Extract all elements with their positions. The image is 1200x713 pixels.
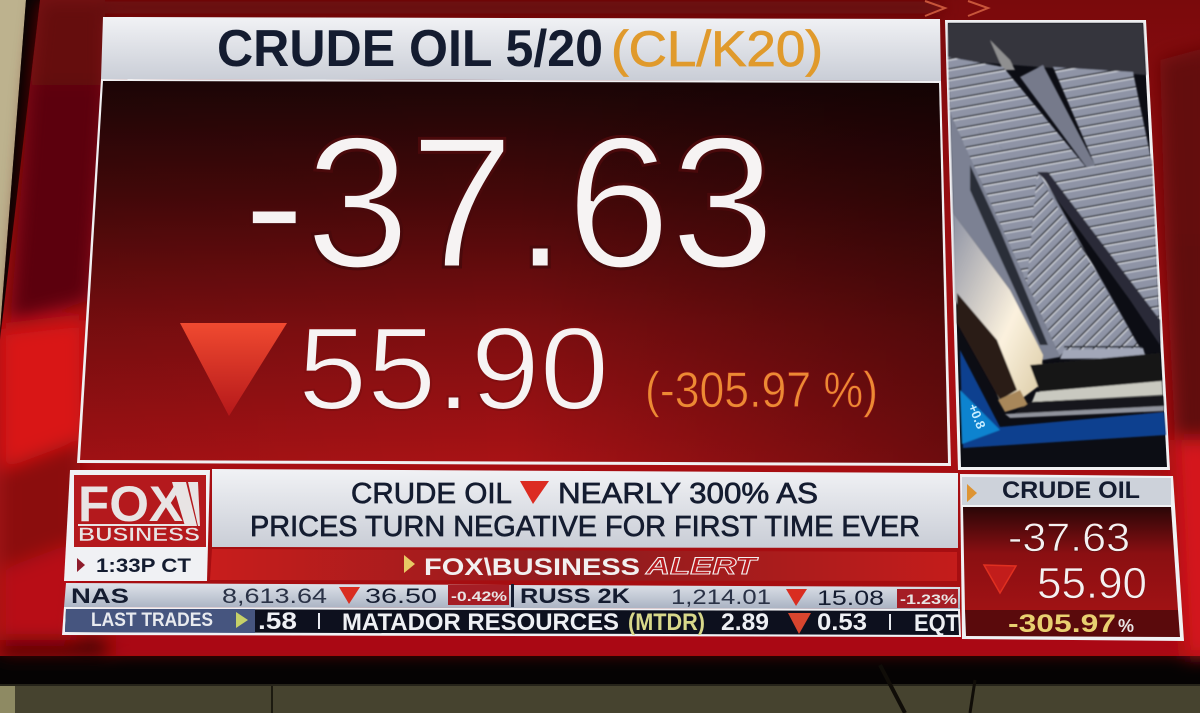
headline line 2: PRICES TURN NEGATIVE FOR FIRST TIME EVER <box>250 511 920 543</box>
last trades ticker: MATADOR RESOURCES <box>342 609 619 636</box>
left bar <box>948 57 1143 357</box>
fox business logo and time: BUSINESS <box>78 525 200 546</box>
title bar: (CL/K20) <box>611 21 823 77</box>
lower frame bands <box>1030 353 1162 392</box>
index ticker: 15.08 <box>817 587 884 610</box>
index ticker: 36.50 <box>365 585 437 608</box>
side image: engraved oil bars: +0.8 <box>965 402 989 431</box>
big price: -37.63 <box>243 98 775 307</box>
headline: NEARLY 300% AS <box>558 478 818 510</box>
fox business logo and time: 1:33P CT <box>96 556 191 577</box>
panel: crude oil side quote: 55.90 <box>1037 559 1147 608</box>
percent change: (-305.97 %) <box>645 362 878 418</box>
time <box>77 558 85 572</box>
last trades ticker: .58 <box>258 608 297 635</box>
blue screen reflection <box>960 350 1166 448</box>
index ticker: 1,214.01 <box>671 586 771 609</box>
side image: engraved oil bars <box>945 20 1170 470</box>
logo text: FOX <box>78 476 183 532</box>
alert bar <box>210 549 957 581</box>
cables below tv <box>271 665 975 713</box>
index ticker: -0.42% <box>451 588 508 604</box>
title bar: CRUDE OIL 5/20 <box>217 20 603 78</box>
last trades ticker: (MTDR) <box>628 609 705 636</box>
last trades ticker: LAST TRADES <box>91 610 213 631</box>
panel: main quote <box>77 79 951 466</box>
left side of bar <box>950 113 1060 360</box>
down triangle <box>180 323 287 416</box>
last trades ticker: 0.53 <box>817 609 867 636</box>
index ticker <box>64 583 960 610</box>
panel: crude oil side quote: % <box>1118 616 1134 636</box>
index ticker: RUSS 2K <box>520 585 630 608</box>
index ticker: NAS <box>71 585 129 608</box>
panel: crude oil side quote: -37.63 <box>1008 516 1130 560</box>
headline <box>212 469 958 548</box>
alert bar: FOX\BUSINESS <box>424 554 640 581</box>
panel: crude oil side quote: CRUDE OIL <box>1002 477 1140 504</box>
last trades ticker: 2.89 <box>721 609 769 636</box>
index ticker: 8,613.64 <box>222 585 327 608</box>
gold frame and glare <box>953 213 1043 408</box>
last trades ticker: EQT <box>914 610 959 637</box>
panel: crude oil side quote: -305.97 <box>1008 610 1116 638</box>
wedge between bars <box>1020 65 1095 172</box>
title bar <box>101 17 941 81</box>
last trades ticker <box>62 607 961 637</box>
lower right bar <box>1037 160 1160 335</box>
index ticker: -1.23% <box>900 591 958 607</box>
panel: crude oil side quote <box>960 474 1184 641</box>
alert bar: ALERT <box>645 553 759 580</box>
headline line 1: CRUDE OIL <box>351 478 512 510</box>
change value: 55.90 <box>298 303 609 434</box>
top right bar <box>1053 67 1152 170</box>
fox business logo and time <box>64 470 210 581</box>
